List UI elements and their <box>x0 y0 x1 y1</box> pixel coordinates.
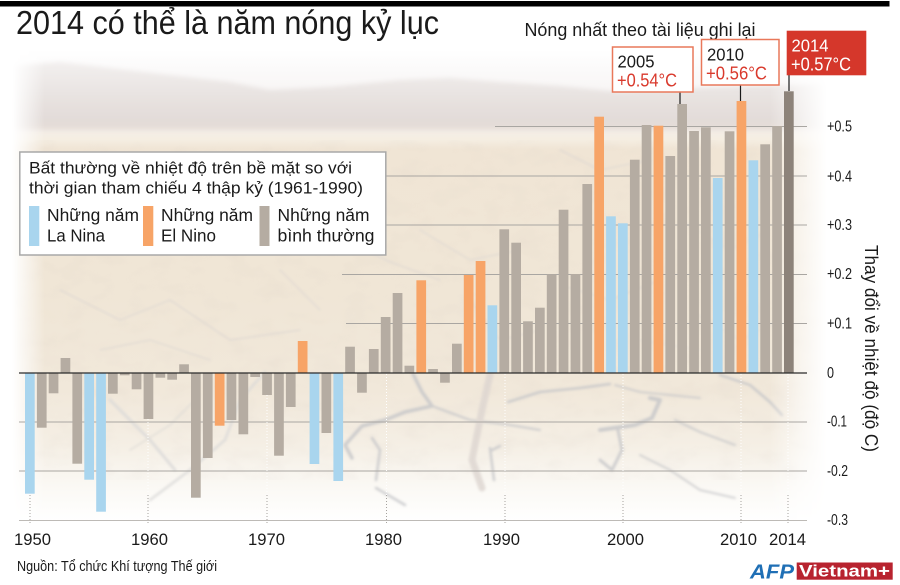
bars: normal years <box>37 104 782 498</box>
logo: AFP Vietnam+ <box>749 562 893 584</box>
legend item: La Nina: Những năm <box>47 205 139 225</box>
callout: 2014: +0.57°C <box>791 55 851 75</box>
callout: 2005 <box>612 47 693 104</box>
x axis year labels: 1950 <box>14 530 51 549</box>
y axis labels: +0.3 <box>827 217 852 234</box>
legend heading: Bất thường về nhiệt độ trên bề mặt so với <box>29 158 352 177</box>
y axis labels: +0.2 <box>827 266 852 283</box>
legend item: La Nina: La Nina <box>47 226 105 246</box>
bars: El Nino years <box>215 101 746 426</box>
x axis year labels: 1970 <box>248 530 285 549</box>
legend heading: thời gian tham chiếu 4 thập kỷ (1961-1990) <box>29 178 363 197</box>
chart heading: hottest on record: Nóng nhất theo tài liệu ghi lại <box>524 19 756 40</box>
callout: 2010: 2010 <box>707 45 744 65</box>
legend item: El Nino: El Nino <box>161 226 216 246</box>
legend item: El Nino <box>143 205 253 246</box>
y axis labels: +0.1 <box>827 316 852 332</box>
legend item: normal years <box>260 205 374 246</box>
x axis year labels: 1980 <box>365 530 402 549</box>
header bar <box>0 1 890 6</box>
grid lines <box>19 126 807 520</box>
y axis labels: 0 <box>827 365 834 382</box>
y axis labels: -0.2 <box>827 463 848 480</box>
callout: 2005: +0.54°C <box>617 71 677 91</box>
x axis year labels: 1960 <box>131 530 168 549</box>
callout: 2005: 2005 <box>618 52 654 72</box>
x axis year labels: 2000 <box>607 530 644 549</box>
y axis labels: -0.3 <box>827 512 848 529</box>
y axis labels: -0.1 <box>827 414 847 431</box>
x axis year labels: 2010 <box>720 530 757 549</box>
x axis year labels: 2014 <box>769 530 806 549</box>
callout: 2014: 2014 <box>792 36 829 56</box>
x axis year labels <box>14 530 806 549</box>
legend item: El Nino: Những năm <box>161 205 253 225</box>
bar: 2014 highlighted <box>784 91 794 373</box>
y axis labels: +0.4 <box>827 168 852 185</box>
logo: AFP Vietnam+: Vietnam+ <box>799 562 890 580</box>
callout: 2010: +0.56°C <box>706 63 767 83</box>
y axis title: Thay đổi về nhiệt độ (độ C) <box>861 245 881 452</box>
bar chart <box>25 91 794 512</box>
bars: La Nina years <box>25 160 758 512</box>
logo: AFP Vietnam+: AFP <box>749 562 795 584</box>
callout: 2014 <box>787 31 866 91</box>
y axis labels <box>827 118 852 529</box>
legend item: normal years: Những năm <box>278 205 370 225</box>
source note: Nguồn: Tổ chức Khí tượng Thế giới <box>17 559 217 575</box>
x axis year labels: 1990 <box>483 530 520 549</box>
callout: 2010 <box>702 40 779 101</box>
zero axis <box>19 372 807 374</box>
title: 2014 có thể là năm nóng kỷ lục <box>16 5 439 42</box>
background photo: cracked dry lake bed <box>12 50 830 522</box>
legend panel <box>20 152 386 255</box>
legend item: La Nina <box>29 205 139 246</box>
legend item: normal years: bình thường <box>278 226 374 246</box>
y axis labels: +0.5 <box>827 118 852 135</box>
decade tick marks <box>30 374 788 524</box>
